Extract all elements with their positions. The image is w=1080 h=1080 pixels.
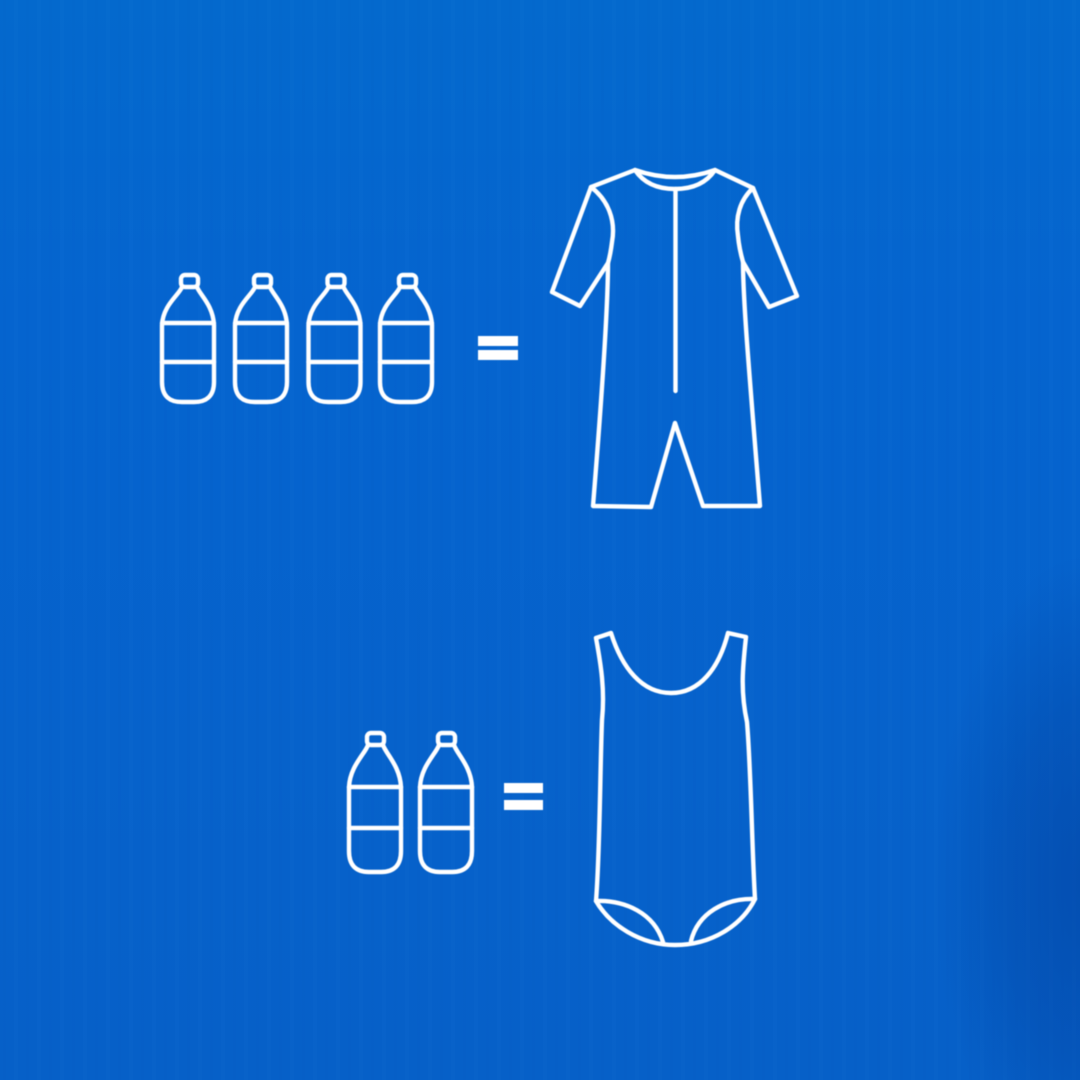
icon: bottle 2: [235, 275, 287, 402]
equals sign: top: [478, 336, 518, 360]
icon: bottle 4: [380, 275, 432, 402]
equals sign: bottom: [504, 783, 543, 810]
artwork: line icons: [162, 170, 797, 945]
icon: bottle 3: [308, 275, 360, 402]
group: two bottles: [349, 733, 472, 872]
icon: bottle 1: [162, 275, 214, 402]
icon: bottle 5: [349, 733, 401, 872]
icon: short-sleeve full-body swimsuit: [552, 170, 797, 507]
group: four bottles: [162, 275, 432, 402]
icon: sleeveless one-piece swimsuit: [596, 633, 755, 945]
icon: bottle 6: [420, 733, 472, 872]
